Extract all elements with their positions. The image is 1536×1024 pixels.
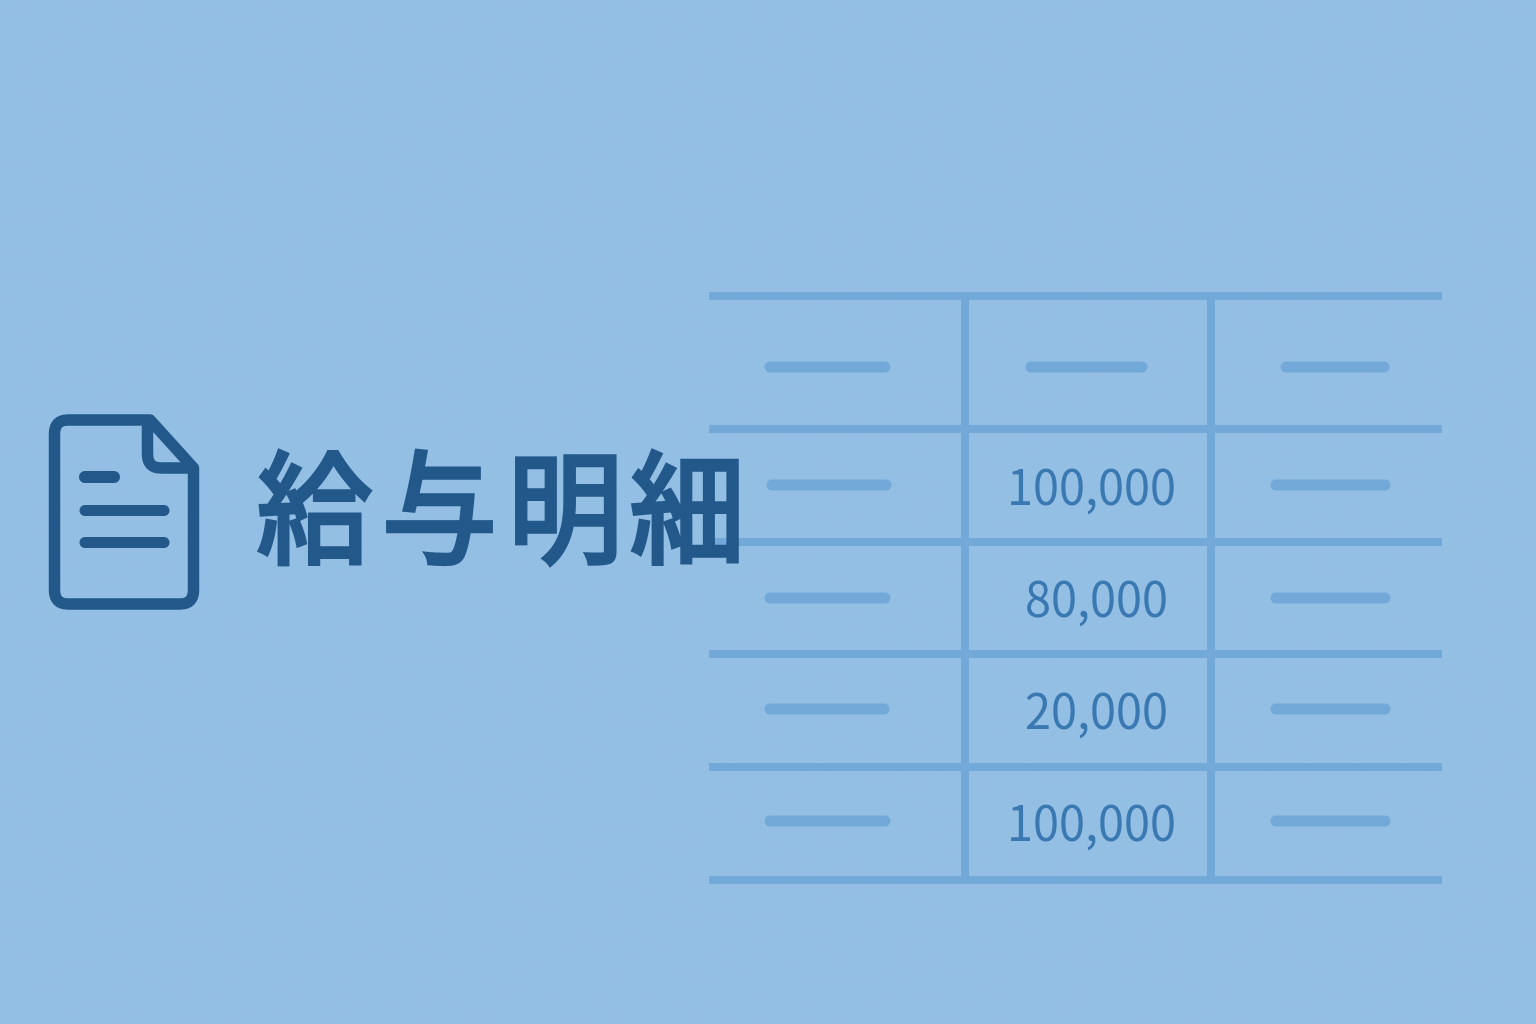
table placeholder dashes [770, 367, 1385, 821]
table amounts: 100,000 [1007, 449, 1176, 520]
title: 給与明細 [257, 414, 745, 590]
table amounts: 80,000 [1025, 561, 1168, 632]
table amounts [1007, 449, 1176, 856]
icon: document [54, 420, 194, 604]
table grid [709, 296, 1442, 880]
table amounts: 20,000 [1025, 673, 1168, 744]
table amounts: 100,000 [1007, 785, 1176, 856]
